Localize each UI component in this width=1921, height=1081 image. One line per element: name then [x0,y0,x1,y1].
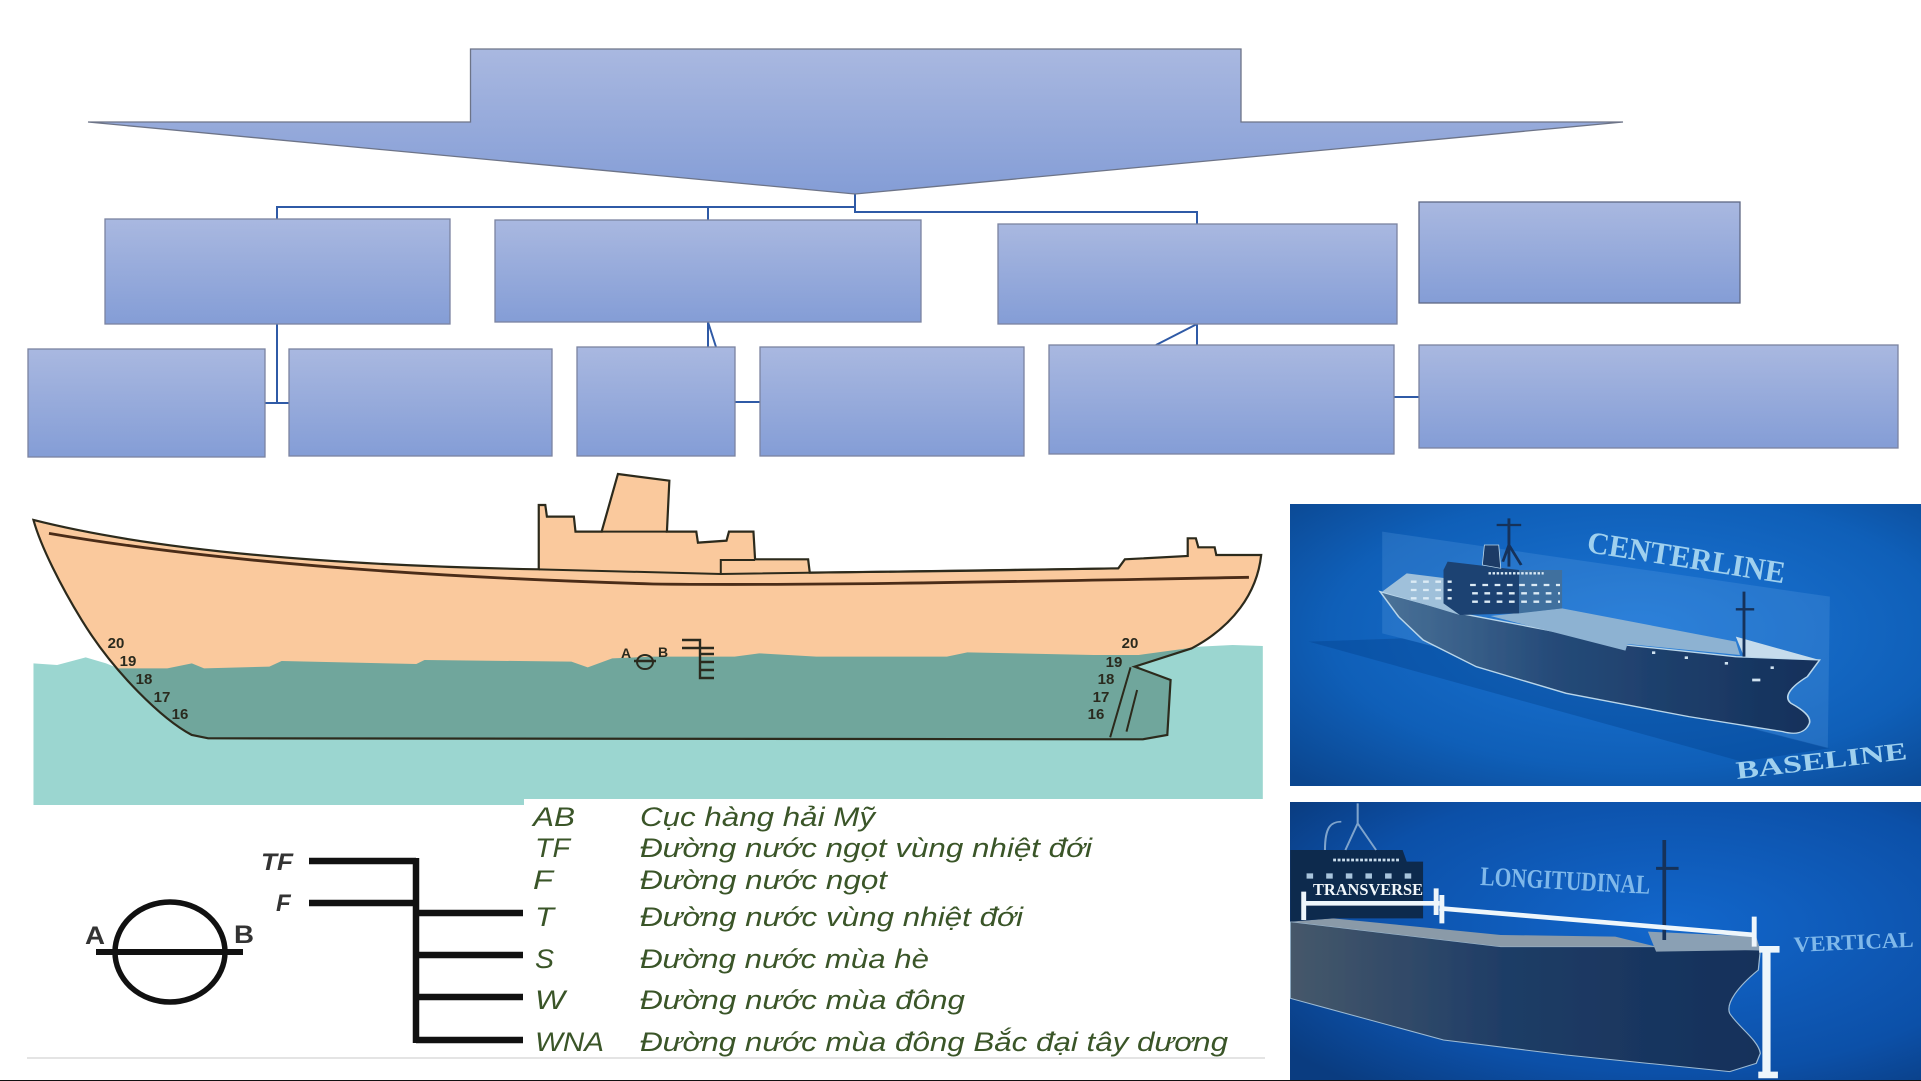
legend: W [535,985,568,1015]
legend: Cục hàng hải Mỹ [640,802,877,832]
photo: centerline and baseline [1290,504,1921,786]
load line symbol: circle [85,902,254,1002]
draft numbers stern: 17 [154,689,170,706]
legend: Đường nước vùng nhiệt đới [640,902,1024,932]
box: level 2 b [289,349,552,456]
sea and hull [33,474,1263,805]
legend: Đường nước mùa đông [640,985,965,1015]
box: level 2 f [1419,345,1898,448]
draft numbers bow: 19 [1106,654,1122,671]
box: level 2 c [577,347,735,456]
label: BASELINE: BASELINE [1735,738,1909,785]
draft numbers bow: 18 [1098,671,1114,688]
legend: Đường nước ngọt vùng nhiệt đới [640,833,1093,863]
draft numbers stern: 19 [120,653,136,670]
draft numbers stern: 16 [172,706,188,723]
ship rendering [1309,518,1830,762]
legend: S [535,944,554,974]
white legend background [524,799,1264,1058]
plimsoll mark on hull [621,640,714,678]
label: TRANSVERSE: TRANSVERSE [1313,880,1423,899]
legend divider [27,1057,1265,1059]
box: level 1 left [105,219,450,324]
box: level 1 centre [495,220,921,322]
draft numbers bow [1088,635,1138,723]
connectors [265,194,1419,403]
legend: WNA [535,1027,604,1057]
legend: T [535,902,557,932]
label: LONGITUDINAL: LONGITUDINAL [1480,861,1651,900]
draft numbers stern [108,635,188,723]
box: level 2 e [1049,345,1394,454]
main arrow box [88,49,1623,194]
plimsoll mark on hull: A [621,645,631,661]
draft numbers stern: 18 [136,671,152,688]
plimsoll mark on hull: B [658,644,668,660]
ship rendering with axes [1290,803,1780,1075]
legend: TF [535,833,572,863]
label: VERTICAL: VERTICAL [1793,927,1914,957]
legend: AB [531,802,575,832]
ship load line diagram [33,474,1263,805]
legend: F [533,865,555,895]
legend: Đường nước mùa hè [640,944,929,974]
load line symbol: comb: TF [261,849,294,876]
draft numbers stern: 20 [108,635,124,652]
legend: Đường nước ngọt [640,865,889,895]
box: level 1 far right [1419,202,1740,303]
bottom edge line [0,1080,1921,1081]
box: level 1 right [998,224,1397,324]
box: level 2 d [760,347,1024,456]
load line symbol: comb: F [276,890,292,917]
photo: transverse longitudinal vertical [1290,802,1921,1080]
legend: Đường nước mùa đông Bắc đại tây dương [640,1026,1228,1057]
box: level 2 a [28,349,265,457]
flowchart [28,49,1898,457]
load line symbol: comb [261,849,523,1043]
load line symbol: circle: A [85,922,105,950]
draft numbers bow: 17 [1093,689,1109,706]
load line symbol: circle: B [234,921,254,949]
legend [531,802,1228,1057]
label: CENTERLINE: CENTERLINE [1585,524,1788,590]
draft numbers bow: 16 [1088,706,1104,723]
draft numbers bow: 20 [1122,635,1138,652]
